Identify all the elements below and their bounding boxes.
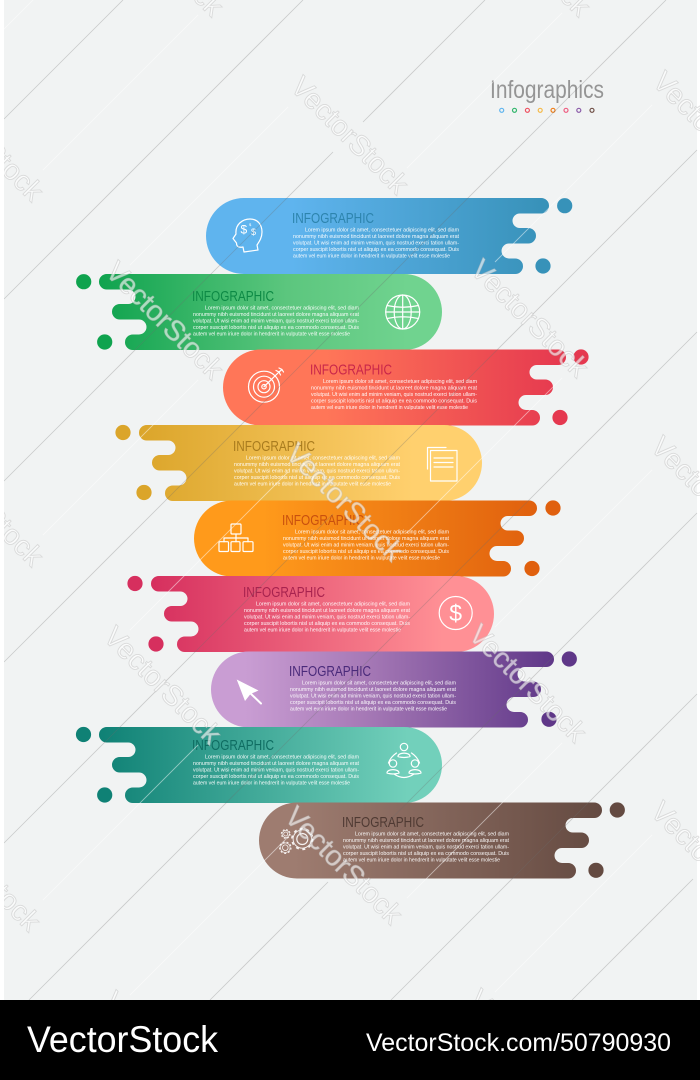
panel 9: brown	[259, 802, 625, 878]
icon: people circle	[387, 743, 421, 778]
text block 5: corper suscipit lobortis nisl ut aliquip ex ea commodo consequat. Duis	[283, 549, 449, 555]
watermark: VectorStock repeated: VectorStock	[279, 438, 410, 568]
watermark: VectorStock repeated: VectorStock	[284, 71, 415, 201]
text block 4	[233, 439, 400, 488]
text block 5	[282, 513, 449, 562]
icon: head with dollar signs: $	[251, 227, 256, 237]
text block 2: autem vel eum iriure dolor in hendrerit in vulputate velit esse molestie	[193, 332, 350, 338]
text block 4: INFOGRAPHIC	[233, 439, 315, 455]
text block 1: volutpat. Ut wisi enim ad minim veniam, quis nostrud exerci tation ullam-	[293, 241, 459, 247]
text block 2: nonummy nibh euismod tincidunt ut laoreet dolore magna aliquam erat	[193, 312, 359, 318]
text block 2: volutpat. Ut wisi enim ad minim veniam, quis nostrud exerci tation ullam-	[193, 319, 359, 325]
text block 5: volutpat. Ut wisi enim ad minim veniam, quis nostrud exerci tation ullam-	[283, 543, 449, 549]
panel 4: yellow	[115, 425, 482, 501]
text block 1: INFOGRAPHIC	[292, 211, 374, 227]
text block 6: autem vel eum iriure dolor in hendrerit in vulputate velit esse molestie	[244, 628, 401, 634]
text block 7: INFOGRAPHIC	[289, 664, 371, 680]
watermark: VectorStock repeated: VectorStock	[99, 256, 230, 386]
text block 7: corper suscipit lobortis nisl ut aliquip ex ea commodo consequat. Duis	[290, 700, 456, 706]
icon: dollar coin: $	[449, 600, 462, 626]
icon: head with dollar signs: $	[240, 222, 248, 236]
text block 5: INFOGRAPHIC	[282, 513, 364, 529]
text block 9	[342, 815, 509, 864]
text block 6: corper suscipit lobortis nisl ut aliquip ex ea commodo consequat. Duis	[244, 621, 410, 627]
text block 8: autem vel eum iriure dolor in hendrerit in vulputate velit esse molestie	[193, 781, 350, 787]
panel 1: blue	[206, 198, 572, 274]
text block 8: volutpat. Ut wisi enim ad minim veniam, quis nostrud exerci tation ullam-	[193, 768, 359, 774]
text block 2	[192, 289, 359, 338]
text block 8: corper suscipit lobortis nisl ut aliquip ex ea commodo consequat. Duis	[193, 774, 359, 780]
text block 7: nonummy nibh euismod tincidunt ut laoreet dolore magna aliquam erat	[290, 687, 456, 693]
panel 7: purple	[211, 651, 577, 728]
text block 2: corper suscipit lobortis nisl ut aliquip ex ea commodo consequat. Duis	[193, 325, 359, 331]
footer bar: VectorStock.com/50790930	[366, 1029, 671, 1057]
icon: organisation chart	[219, 524, 253, 552]
text block 3	[310, 362, 477, 411]
panel 3: red	[223, 349, 589, 426]
text block 4: autem vel eum iriure dolor in hendrerit in vulputate velit esse molestie	[234, 482, 391, 488]
icon: documents	[428, 448, 457, 481]
text block 1: Lorem ipsum dolor sit amet, consectetuer adipiscing elit, sed diam	[305, 228, 459, 234]
text block 3: autem vel eum iriure dolor in hendrerit in vulputate velit esse molestie	[311, 405, 468, 411]
text block 9: Lorem ipsum dolor sit amet, consectetuer adipiscing elit, sed diam	[355, 832, 509, 838]
icon: head with dollar signs: $	[249, 222, 252, 227]
left edge strip	[0, 0, 4, 1000]
panel 6: pink	[127, 576, 494, 652]
text block 3: nonummy nibh euismod tincidunt ut laoreet dolore magna aliquam erat	[311, 386, 477, 392]
watermark: VectorStock repeated: VectorStock	[462, 619, 593, 749]
text block 3: corper suscipit lobortis nisl ut aliquip ex ea commodo consequat. Duis	[311, 399, 477, 405]
text block 6: Lorem ipsum dolor sit amet, consectetuer adipiscing elit, sed diam	[256, 602, 410, 608]
text block 7: Lorem ipsum dolor sit amet, consectetuer adipiscing elit, sed diam	[302, 681, 456, 687]
text block 8: nonummy nibh euismod tincidunt ut laoreet dolore magna aliquam erat	[193, 761, 359, 767]
text block 6: nonummy nibh euismod tincidunt ut laoreet dolore magna aliquam erat	[244, 608, 410, 614]
text block 4: volutpat. Ut wisi enim ad minim veniam, quis nostrud exerci tation ullam-	[234, 469, 400, 475]
text block 5: Lorem ipsum dolor sit amet, consectetuer adipiscing elit, sed diam	[295, 530, 449, 536]
heading: Infographics	[490, 76, 604, 112]
icon: head with dollar signs	[233, 219, 262, 252]
text block 8: Lorem ipsum dolor sit amet, consectetuer adipiscing elit, sed diam	[205, 755, 359, 761]
text block 3: INFOGRAPHIC	[310, 362, 392, 378]
text block 7: autem vel eum iriure dolor in hendrerit in vulputate velit esse molestie	[290, 707, 447, 713]
text block 2: Lorem ipsum dolor sit amet, consectetuer adipiscing elit, sed diam	[205, 306, 359, 312]
text block 1: nonummy nibh euismod tincidunt ut laoreet dolore magna aliquam erat	[293, 234, 459, 240]
icon: dollar coin	[439, 596, 472, 630]
text block 5: nonummy nibh euismod tincidunt ut laoreet dolore magna aliquam erat	[283, 536, 449, 542]
text block 9: corper suscipit lobortis nisl ut aliquip ex ea commodo consequat. Duis	[343, 851, 509, 857]
heading: Infographics: Infographics	[490, 76, 604, 104]
text block 9: volutpat. Ut wisi enim ad minim veniam, quis nostrud exerci tation ullam-	[343, 845, 509, 851]
panel 8: teal	[76, 727, 442, 803]
footer bar: VectorStock	[27, 1019, 218, 1060]
text block 4: Lorem ipsum dolor sit amet, consectetuer adipiscing elit, sed diam	[246, 456, 400, 462]
text block 4: corper suscipit lobortis nisl ut aliquip ex ea commodo consequat. Duis	[234, 475, 400, 481]
text block 1: autem vel eum iriure dolor in hendrerit in vulputate velit esse molestie	[293, 254, 450, 260]
text block 9: autem vel eum iriure dolor in hendrerit in vulputate velit esse molestie	[343, 858, 500, 864]
text block 1	[292, 211, 459, 260]
panel 5: orange	[194, 500, 561, 576]
text block 9: INFOGRAPHIC	[342, 815, 424, 831]
icon: cursor arrow	[237, 680, 261, 704]
icon: globe	[386, 295, 420, 329]
text block 1: corper suscipit lobortis nisl ut aliquip ex ea commodo consequat. Duis	[293, 247, 459, 253]
icon: gears	[280, 829, 313, 853]
text block 6: volutpat. Ut wisi enim ad minim veniam, quis nostrud exerci tation ullam-	[244, 615, 410, 621]
text block 4: nonummy nibh euismod tincidunt ut laoreet dolore magna aliquam erat	[234, 462, 400, 468]
panel 2: green	[76, 274, 442, 350]
text block 3: Lorem ipsum dolor sit amet, consectetuer adipiscing elit, sed diam	[323, 379, 477, 385]
text block 2: INFOGRAPHIC	[192, 289, 274, 305]
watermark: VectorStock repeated: VectorStock	[464, 254, 595, 384]
text block 7	[289, 664, 456, 713]
text block 9: nonummy nibh euismod tincidunt ut laoreet dolore magna aliquam erat	[343, 838, 509, 844]
text block 3: volutpat. Ut wisi enim ad minim veniam, quis nostrud exerci tation ullam-	[311, 392, 477, 398]
watermark: VectorStock repeated: VectorStock	[278, 801, 409, 931]
text block 8: INFOGRAPHIC	[192, 738, 274, 754]
icon: target with arrow	[248, 368, 284, 402]
text block 7: volutpat. Ut wisi enim ad minim veniam, quis nostrud exerci tation ullam-	[290, 694, 456, 700]
footer bar	[0, 1000, 700, 1080]
text block 6: INFOGRAPHIC	[243, 585, 325, 601]
watermark: VectorStock repeated: VectorStock	[97, 621, 228, 751]
text block 8	[192, 738, 359, 787]
text block 5: autem vel eum iriure dolor in hendrerit in vulputate velit esse molestie	[283, 556, 440, 562]
text block 6	[243, 585, 410, 634]
